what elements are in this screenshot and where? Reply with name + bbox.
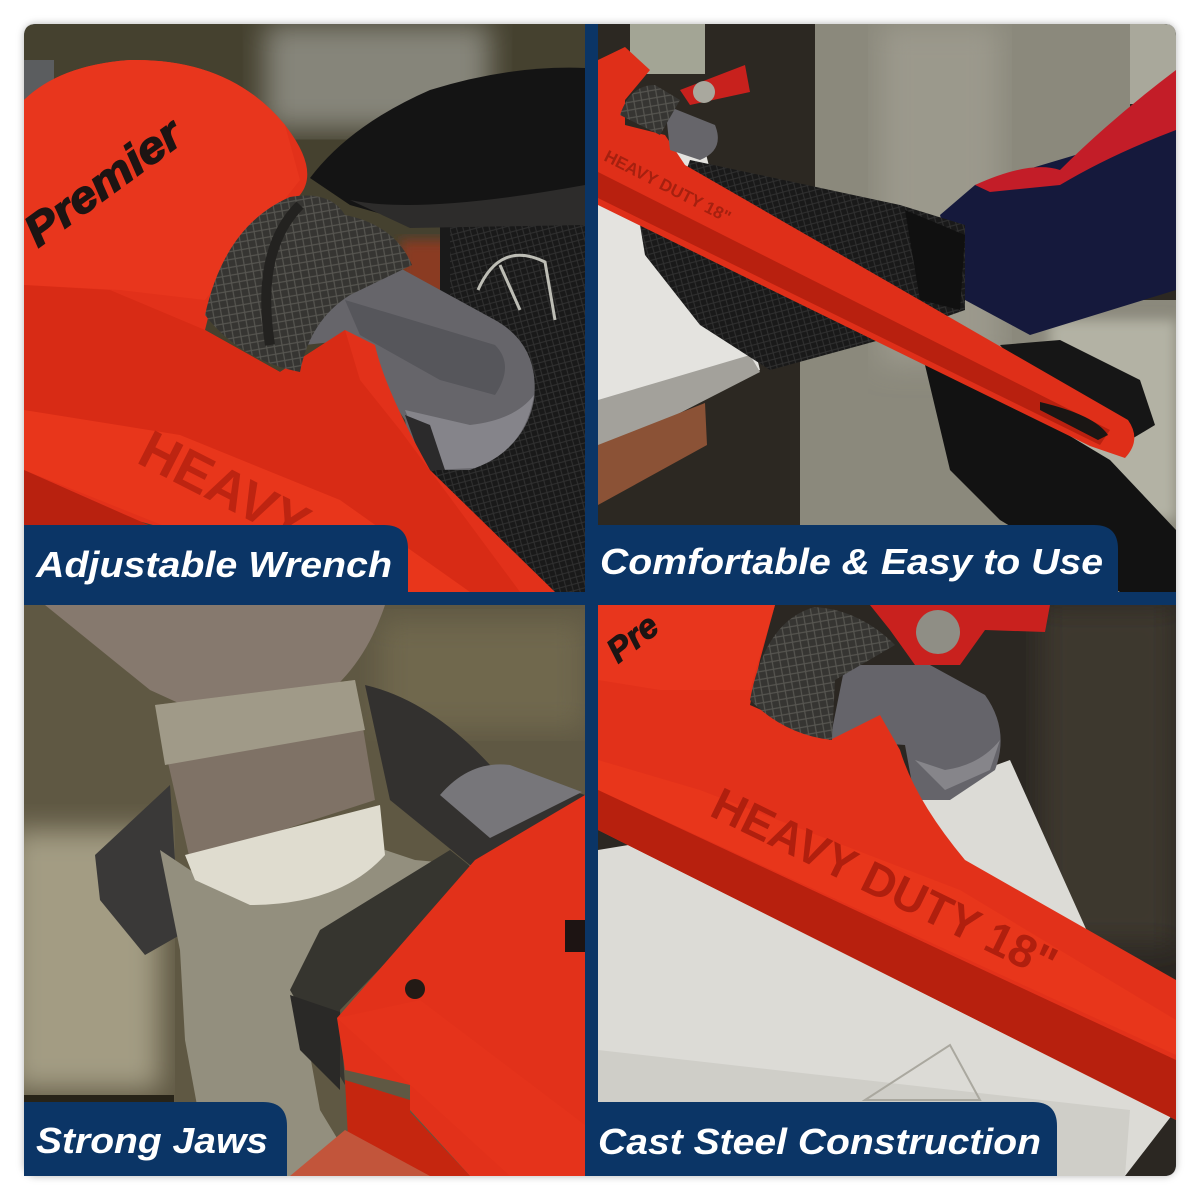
label: cast steel construction: Cast Steel Construction xyxy=(598,1121,1041,1162)
red body xyxy=(337,795,585,1176)
panel: cast steel construction xyxy=(598,605,1176,1176)
label: comfortable and easy to use xyxy=(598,525,1118,604)
sleeve xyxy=(940,125,1176,335)
glove xyxy=(310,68,585,225)
panel: comfortable and easy to use: HEAVY DUTY 18" xyxy=(601,147,734,227)
label: adjustable wrench xyxy=(24,525,408,604)
back jaw xyxy=(365,685,585,865)
wrench lettering: HEAVY DUTY 18" xyxy=(704,777,1065,989)
knurled nut xyxy=(750,607,895,740)
valve xyxy=(870,605,1050,665)
knurled nut xyxy=(205,195,412,372)
panel: adjustable wrench: HEAVY xyxy=(130,419,319,555)
divider bars xyxy=(585,24,598,1176)
label: adjustable wrench: Adjustable Wrench xyxy=(35,544,392,585)
label: cast steel construction xyxy=(598,1102,1057,1176)
left jaw xyxy=(95,785,180,955)
red wrench xyxy=(598,605,1176,1120)
teeth xyxy=(290,850,475,1085)
glove upper xyxy=(640,160,965,370)
thread xyxy=(185,805,385,905)
white pipe xyxy=(598,152,760,400)
panel: comfortable and easy to use xyxy=(598,24,1176,592)
jaw xyxy=(830,665,1001,800)
jaw and knurl xyxy=(667,109,718,160)
wrench text: Premier xyxy=(15,108,194,256)
red wrench body xyxy=(24,60,555,592)
glove lower xyxy=(1000,340,1155,440)
panel: cast steel construction: Pre xyxy=(600,607,666,670)
label: strong jaws xyxy=(24,1102,287,1176)
panel: strong jaws xyxy=(10,605,585,1176)
fitting xyxy=(160,850,470,1176)
grey jaw xyxy=(305,268,535,470)
red handle xyxy=(598,47,1134,458)
panel: adjustable wrench xyxy=(15,24,585,592)
white pipe surface xyxy=(598,760,1176,1176)
label: strong jaws: Strong Jaws xyxy=(36,1120,268,1161)
vertical pipe xyxy=(168,730,375,854)
label: comfortable and easy to use: Comfortable & Easy to Use xyxy=(600,541,1103,582)
upper elbow xyxy=(45,605,385,702)
valve xyxy=(680,65,750,105)
